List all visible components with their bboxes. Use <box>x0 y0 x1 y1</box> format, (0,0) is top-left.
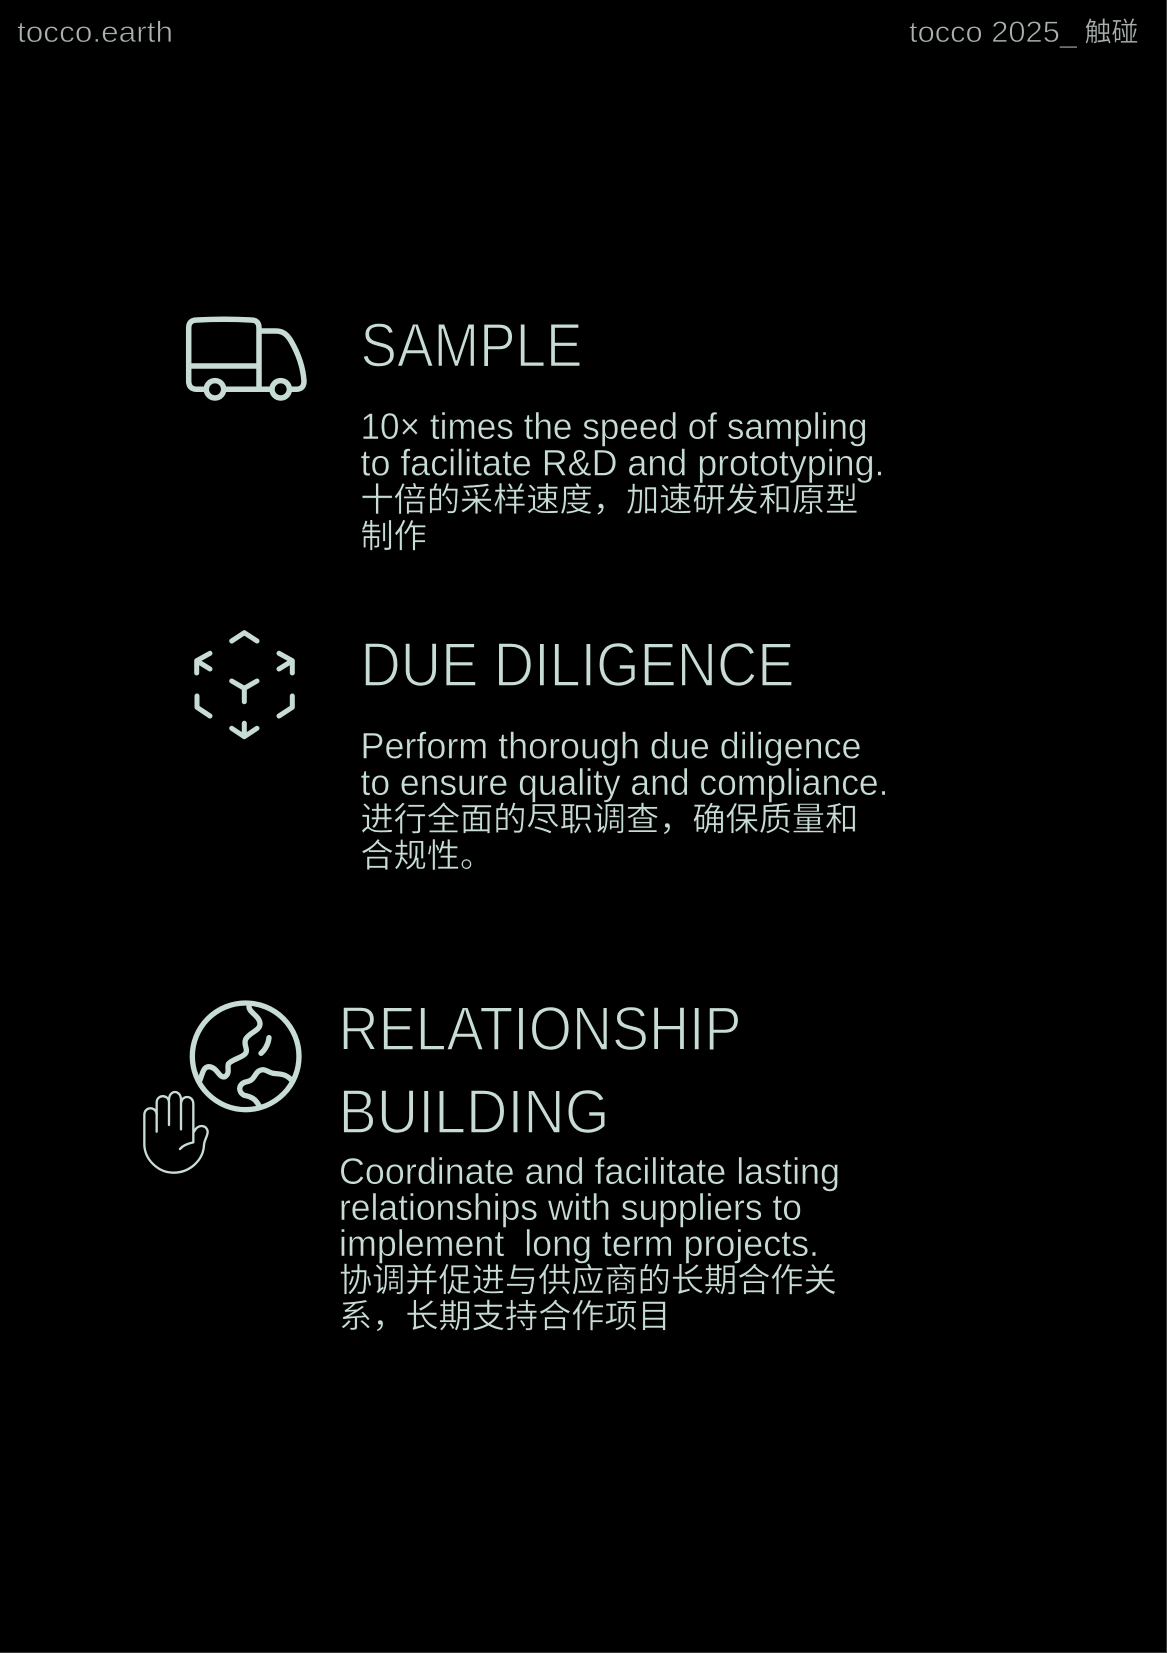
header: site name: tocco.earth <box>17 16 173 49</box>
heading: relationship building: RELATIONSHIP <box>338 994 742 1064</box>
text block: relationship description: implement long term projects. <box>339 1223 819 1264</box>
text block: relationship description <box>339 1151 840 1338</box>
text block: relationship description: 系，长期支持合作项目 <box>339 1288 671 1338</box>
icon: raised hand <box>144 1092 208 1173</box>
header: edition label: tocco 2025_ <box>909 16 1078 49</box>
heading: relationship building <box>338 994 742 1147</box>
text block: relationship description: 协调并促进与供应商的长期合作关 <box>339 1252 837 1302</box>
heading: relationship building: BUILDING <box>338 1077 610 1147</box>
heading: sample: SAMPLE <box>360 310 582 380</box>
text block: due diligence description: 合规性。 <box>360 828 493 877</box>
text block: due diligence description: to ensure quality and compliance. <box>360 762 888 803</box>
text block: sample description: 10× times the speed of sampling <box>360 406 868 447</box>
text block: relationship description: Coordinate and facilitate lasting <box>339 1151 840 1192</box>
panel: relationship building <box>144 994 840 1338</box>
text block: sample description: 制作 <box>360 508 427 558</box>
text block: due diligence description: Perform thorough due diligence <box>360 726 862 766</box>
panel: due diligence <box>197 630 888 877</box>
text block: due diligence description: 进行全面的尽职调查，确保质量和 <box>360 792 858 840</box>
text block: relationship description: relationships with suppliers to <box>339 1187 802 1228</box>
header: edition label <box>909 10 1138 50</box>
heading: due diligence: DUE DILIGENCE <box>360 630 794 700</box>
icon: dashed cube <box>197 633 292 737</box>
text block: sample description: 十倍的采样速度，加速研发和原型 <box>360 472 858 521</box>
text block: due diligence description <box>360 726 888 877</box>
header: edition label: 触碰 <box>1084 10 1138 50</box>
text block: sample description <box>360 406 884 558</box>
panel: sample <box>189 310 884 558</box>
text block: sample description: to facilitate R&D and prototyping. <box>360 442 884 484</box>
icon: delivery truck <box>189 319 304 398</box>
icon: globe <box>192 1003 299 1110</box>
